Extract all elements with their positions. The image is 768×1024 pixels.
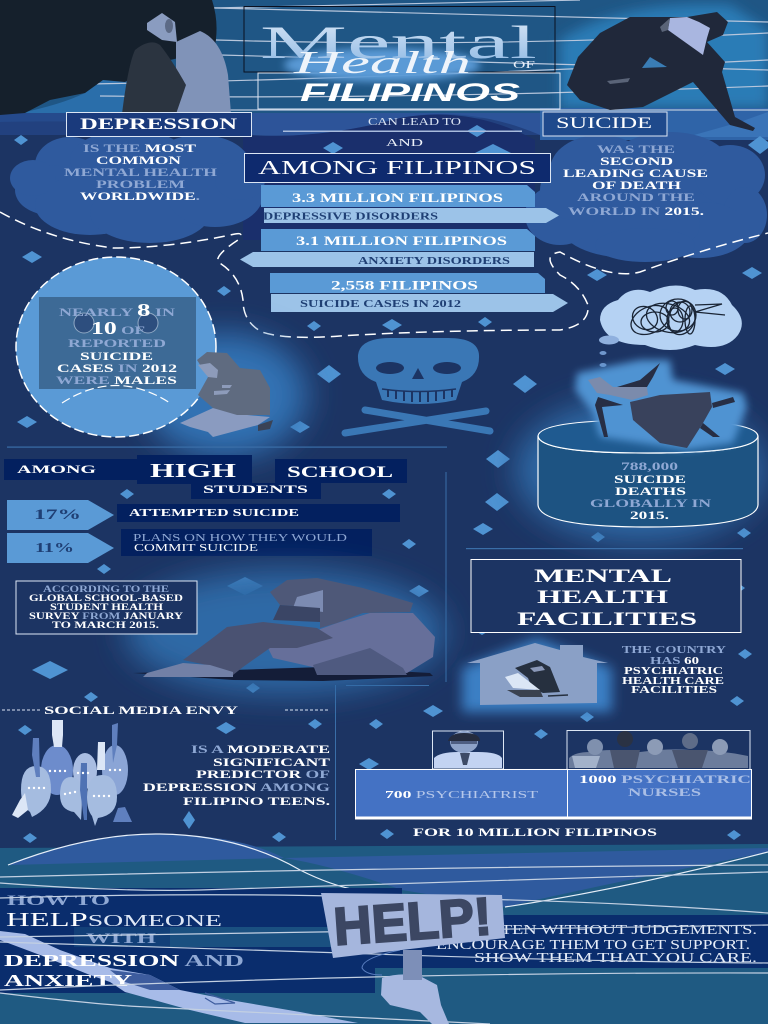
right cloud text: SECOND	[600, 154, 673, 168]
cylinder with suicide deaths stat	[538, 420, 758, 527]
caption: for 10 million filipinos: FOR 10 MILLION FILIPINOS	[413, 827, 657, 839]
heading: suicide	[543, 112, 667, 136]
stat bar: 3.1 million: 3.1 MILLION FILIPINOS	[296, 234, 507, 248]
glow behind falling figure	[575, 360, 747, 450]
left cloud text	[64, 141, 218, 203]
heading: among high school students: AMONG	[17, 462, 96, 476]
heading: among high school students: SCHOOL	[287, 464, 393, 481]
cylinder with suicide deaths stat: 788,000	[621, 459, 678, 473]
icon: house with sad figure	[462, 638, 612, 712]
heading: mental health facilities: HEALTH	[537, 587, 668, 608]
heading: among high school students	[4, 455, 407, 499]
label: attempted suicide: ATTEMPTED SUICIDE	[129, 508, 299, 519]
title block: Mental	[260, 17, 537, 69]
glow behind hooded figure	[143, 333, 307, 457]
callout: 8 in 10 males: NEARLY 8 IN	[59, 300, 175, 320]
stat arrow: 17%: 17%	[34, 507, 81, 523]
table: psychiatrist and nurse counts: NURSES	[628, 785, 701, 799]
cylinder with suicide deaths stat: SUICIDE	[614, 472, 686, 486]
callout: 8 in 10 males: REPORTED	[68, 336, 166, 350]
heading: among high school students: HIGH	[150, 460, 237, 482]
cylinder with suicide deaths stat: DEATHS	[615, 484, 686, 498]
text: the country has 60 facilities: HEALTH CARE	[622, 675, 724, 687]
label: attempted suicide	[117, 504, 400, 522]
text: ways to help: SHOW THEM THAT YOU CARE.	[474, 950, 757, 965]
right cloud text: WORLD IN 2015.	[568, 204, 704, 218]
label: plans on how they would commit suicide: COMMIT SUICIDE	[134, 543, 258, 554]
callout: 8 in 10 males: CASES IN 2012	[57, 361, 177, 375]
text: ways to help: LISTEN WITHOUT JUDGEMENTS.	[473, 922, 757, 937]
text: how to help someone	[4, 893, 244, 990]
dashed connector path	[0, 212, 768, 337]
text: moderate significant predictor: SIGNIFICANT	[213, 755, 330, 769]
connector text: can lead to: CAN LEAD TO	[368, 117, 461, 128]
glow around cylinder	[515, 398, 765, 542]
text: ways to help: ENCOURAGE THEM TO GET SUPPORT.	[436, 937, 750, 952]
divider	[7, 446, 447, 448]
heading: mental health facilities: MENTAL	[534, 566, 672, 587]
arrow: anxiety disorders	[240, 252, 534, 267]
left cloud text: MENTAL HEALTH	[64, 165, 218, 179]
right figure: man hunched over	[567, 12, 755, 131]
illustration: psychiatrist	[432, 731, 504, 769]
text: how to help someone: ANXIETY	[4, 971, 132, 990]
arrow: depressive disorders: DEPRESSIVE DISORDERS	[263, 212, 438, 222]
illustration: woman sitting hugging knees	[133, 578, 435, 681]
bottom decorative thin lines	[0, 865, 768, 1024]
right cloud text: LEADING CAUSE	[563, 166, 708, 180]
table: psychiatrist and nurse counts	[355, 770, 752, 820]
callout: 8 in 10 males: WERE MALES	[56, 373, 177, 387]
heading: depression: DEPRESSION	[80, 116, 238, 133]
right cloud text: AROUND THE	[577, 190, 695, 204]
stat bar: 3.3 million: 3.3 MILLION FILIPINOS	[292, 191, 503, 205]
callout: 8 in 10 males: SUICIDE	[80, 349, 153, 363]
right cloud text: WAS THE	[597, 142, 675, 156]
stat arrow: 11%: 11%	[35, 540, 74, 555]
illustration: people and speech bubbles	[12, 720, 132, 826]
illustration: psychiatric nurses	[567, 730, 750, 770]
bottom band	[0, 834, 768, 1024]
stat bar: 2,558: 2,558 FILIPINOS	[331, 278, 478, 292]
survey note: STUDENT HEALTH	[50, 603, 164, 613]
text: the country has 60 facilities: HAS 60	[650, 655, 700, 667]
illustration: hooded figure kneeling	[180, 352, 273, 437]
text: how to help someone: DEPRESSION AND	[4, 951, 244, 970]
heading: among high school students: STUDENTS	[203, 482, 309, 496]
survey note: GLOBAL SCHOOL-BASED	[29, 594, 183, 604]
text: ways to help	[436, 922, 757, 965]
left cloud text: PROBLEM	[96, 177, 185, 191]
right cloud text	[563, 142, 708, 218]
left figure: woman with long hair	[0, 0, 231, 115]
survey note: SURVEY FROM JANUARY	[29, 612, 183, 622]
arrow: suicide cases	[271, 294, 568, 312]
text: the country has 60 facilities: THE COUNTRY	[622, 644, 726, 656]
text: how to help someone: HOW TO	[7, 893, 110, 909]
illustration: hand holding help sign	[321, 887, 505, 1024]
diagonal arm stripe	[0, 931, 358, 1023]
callout: 8 in 10 males: 10 OF	[91, 318, 145, 338]
text: moderate significant predictor: FILIPINO TEENS.	[183, 794, 330, 808]
connector text: can lead to: AND	[386, 138, 423, 149]
arrow: anxiety disorders: ANXIETY DISORDERS	[358, 256, 510, 267]
heading: mental health facilities	[471, 560, 741, 632]
heading: suicide: SUICIDE	[556, 115, 652, 132]
left cloud	[10, 130, 265, 243]
scattered diamonds	[14, 125, 768, 843]
label: plans on how they would commit suicide: PLANS ON HOW THEY WOULD	[133, 533, 348, 544]
title block	[244, 6, 560, 109]
title block: Health	[292, 44, 471, 80]
connector text: can lead to	[283, 117, 522, 149]
stat bar: 3.3 million	[261, 185, 535, 207]
survey note	[16, 581, 197, 634]
survey note: ACCORDING TO THE	[43, 585, 169, 595]
text: the country has 60 facilities: FACILITIES	[631, 684, 717, 696]
text: moderate significant predictor	[143, 742, 330, 808]
text: the country has 60 facilities	[622, 644, 726, 696]
text: the country has 60 facilities: PSYCHIATRIC	[624, 665, 723, 677]
section dividers	[335, 472, 743, 840]
left cloud text: IS THE MOST	[83, 141, 196, 155]
callout: 8 in 10 males	[16, 257, 216, 437]
arrow: depressive disorders	[263, 208, 559, 223]
stat arrow: 17%	[7, 500, 114, 530]
stat bar: 3.1 million	[261, 229, 535, 251]
heading: social media envy: SOCIAL MEDIA ENVY	[44, 703, 239, 717]
text: moderate significant predictor: IS A MODERATE	[191, 742, 330, 756]
text: moderate significant predictor: DEPRESSION AMONG	[143, 780, 330, 794]
illustration: thought cloud with scribble	[599, 285, 742, 367]
top decorative thin lines	[90, 0, 768, 110]
heading: among filipinos: AMONG FILIPINOS	[258, 157, 536, 179]
glow behind sitting woman	[125, 570, 445, 694]
survey note: TO MARCH 2015.	[52, 621, 159, 631]
heading: among filipinos	[244, 154, 550, 182]
title block: FILIPINOS	[300, 79, 521, 107]
label: plans on how they would commit suicide	[121, 529, 372, 556]
text: how to help someone: HELP SOMEONE	[6, 909, 222, 931]
illustration: skull and crossbones	[345, 338, 490, 433]
stat bar: 2,558	[270, 273, 545, 293]
illustration: hand holding help sign: HELP!	[332, 887, 493, 957]
left cloud text: WORLDWIDE .	[80, 189, 200, 203]
stat arrow: 11%	[7, 533, 114, 563]
illustration: falling figure	[588, 363, 735, 448]
text: moderate significant predictor: PREDICTOR OF	[196, 767, 330, 781]
table: psychiatrist and nurse counts: 1000 PSYCHIATRIC	[579, 772, 751, 786]
heading: depression	[66, 112, 252, 136]
left cloud text: COMMON	[96, 153, 181, 167]
arrow: suicide cases: SUICIDE CASES IN 2012	[300, 299, 461, 310]
top band	[0, 0, 768, 240]
text: how to help someone: WITH	[86, 931, 157, 947]
right cloud text: OF DEATH	[592, 178, 682, 192]
table: psychiatrist and nurse counts: 700 PSYCHIATRIST	[385, 789, 538, 801]
heading: mental health facilities: FACILITIES	[517, 609, 697, 630]
cylinder with suicide deaths stat: 2015.	[630, 508, 669, 522]
title block: OF	[513, 60, 536, 71]
cylinder with suicide deaths stat: GLOBALLY IN	[590, 496, 711, 510]
right cloud	[525, 132, 767, 262]
